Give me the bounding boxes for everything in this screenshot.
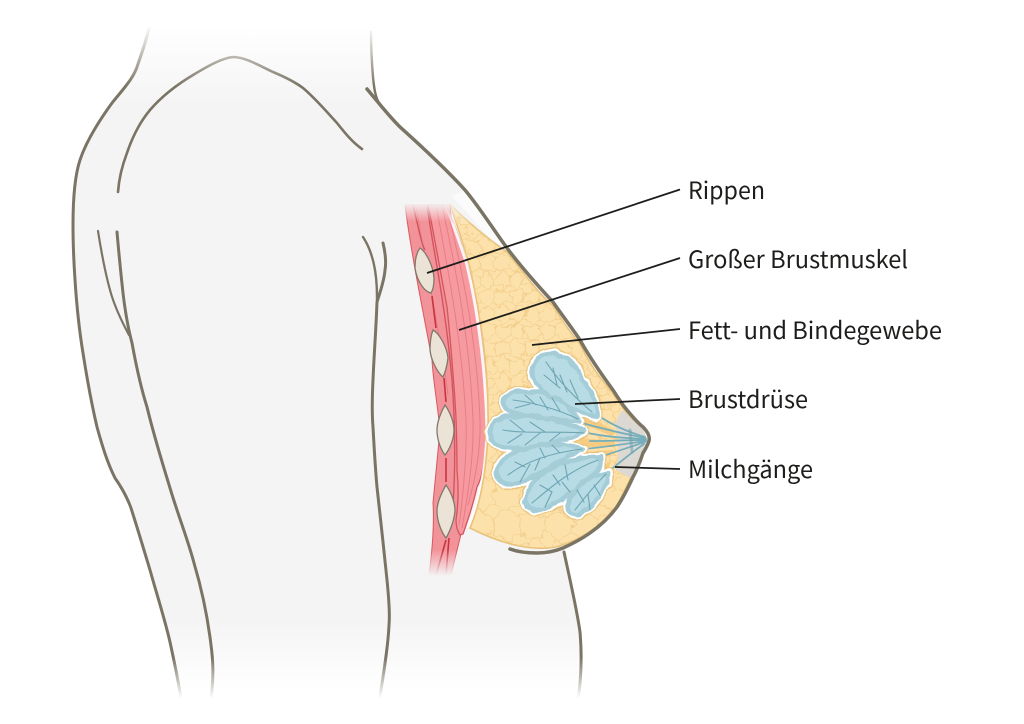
callout: Großer Brustmuskel — [459, 240, 908, 330]
callout: Brustdrüse — [575, 380, 808, 415]
callout: Rippen: Rippen — [688, 171, 765, 206]
callout: Fett- und Bindegewebe — [532, 311, 942, 346]
shoulder arc — [118, 57, 362, 192]
milk ducts — [582, 414, 646, 473]
areola and nipple — [615, 410, 648, 478]
rib 2 — [430, 330, 448, 377]
muscle and rib layer — [405, 205, 488, 575]
fat base — [450, 204, 644, 548]
callout: Rippen — [427, 171, 765, 273]
fat and connective tissue — [450, 200, 650, 558]
body silhouette — [73, 25, 581, 705]
illustration: breast anatomy diagram — [72, 28, 941, 696]
rib 4 — [437, 485, 455, 538]
callout: Brustdrüse: Brustdrüse — [688, 380, 808, 415]
callout: Milchgänge: Milchgänge — [688, 450, 813, 485]
pectoralis major muscle — [428, 205, 488, 535]
ribs — [415, 248, 455, 538]
armpit front branch — [363, 237, 377, 303]
duct wedges — [574, 410, 616, 472]
callout: Großer Brustmuskel: Großer Brustmuskel — [688, 240, 908, 275]
inner arm line upper branch — [98, 231, 129, 335]
white separation strip — [446, 204, 487, 527]
inner arm line — [117, 232, 213, 699]
fat cells — [455, 216, 632, 548]
gland veins — [503, 362, 606, 510]
back and upper arm outline — [73, 28, 181, 699]
neck line — [371, 32, 378, 101]
mammary gland lobes — [490, 353, 608, 515]
body outlines — [73, 28, 581, 700]
pale strip under skin — [452, 190, 507, 250]
muscle fibres — [413, 205, 480, 575]
front arm line — [372, 243, 389, 697]
rib 1 — [415, 248, 434, 293]
callout: Fett- und Bindegewebe: Fett- und Bindegewebe — [688, 311, 942, 346]
intercostal muscle band — [405, 205, 465, 575]
breast outline — [367, 89, 649, 553]
rib 3 — [437, 405, 454, 455]
lower abdomen line — [564, 552, 581, 700]
